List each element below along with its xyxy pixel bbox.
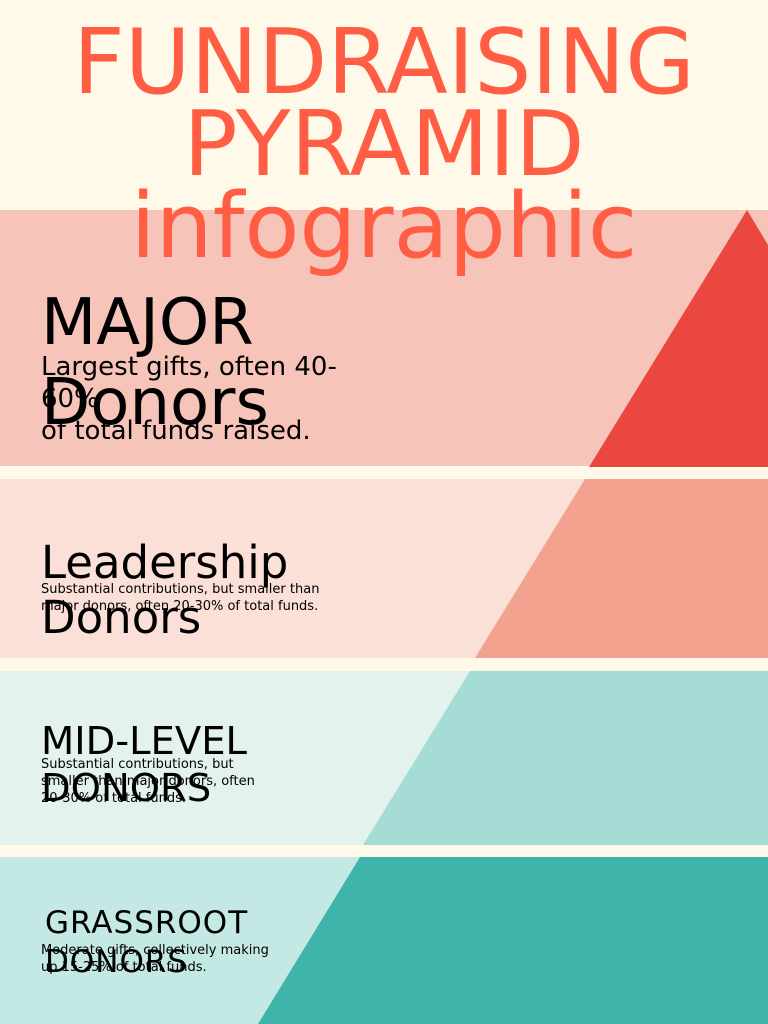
band: major	[0, 210, 768, 467]
heading: leadership	[41, 536, 288, 644]
text: grassroot: up 15-25% of total funds.	[41, 960, 207, 975]
text: major: Largest gifts, often 40-	[41, 352, 337, 382]
text: mid-level: Substantial contributions, but	[41, 757, 234, 772]
heading: leadership: Leadership	[41, 536, 288, 589]
text: leadership: Substantial contributions, but smaller than	[41, 582, 319, 597]
title: FUNDRAISING	[73, 10, 695, 115]
heading: mid-level: MID-LEVEL	[41, 719, 247, 764]
text: mid-level	[41, 757, 255, 806]
text: major	[41, 352, 337, 446]
text: mid-level: 20-30% of total funds.	[41, 791, 186, 806]
heading: major donors: Donors	[41, 366, 269, 440]
heading: major donors	[41, 286, 269, 440]
heading: grassroot: GRASSROOT	[45, 905, 248, 941]
heading: grassroot	[45, 905, 248, 980]
title: infographic	[131, 174, 637, 279]
text: leadership	[41, 582, 319, 614]
text: grassroot: Moderate gifts, collectively making	[41, 943, 269, 958]
text: major: 60%	[41, 384, 99, 414]
heading: leadership: Donors	[41, 591, 201, 644]
heading: mid-level: DONORS	[41, 766, 211, 811]
heading: mid-level	[41, 719, 247, 811]
text: major: of total funds raised.	[41, 416, 311, 446]
title: PYRAMID	[183, 92, 585, 197]
title	[73, 10, 695, 279]
text: mid-level: smaller than major donors, often	[41, 774, 255, 789]
band: mid-level	[0, 671, 768, 845]
heading: grassroot: DONORS	[45, 944, 188, 980]
band: leadership	[0, 479, 768, 658]
text: grassroot	[41, 943, 269, 975]
heading: major donors: MAJOR	[41, 286, 254, 360]
band: grassroot	[0, 857, 768, 1024]
text: leadership: major donors, often 20-30% of total funds.	[41, 599, 318, 614]
